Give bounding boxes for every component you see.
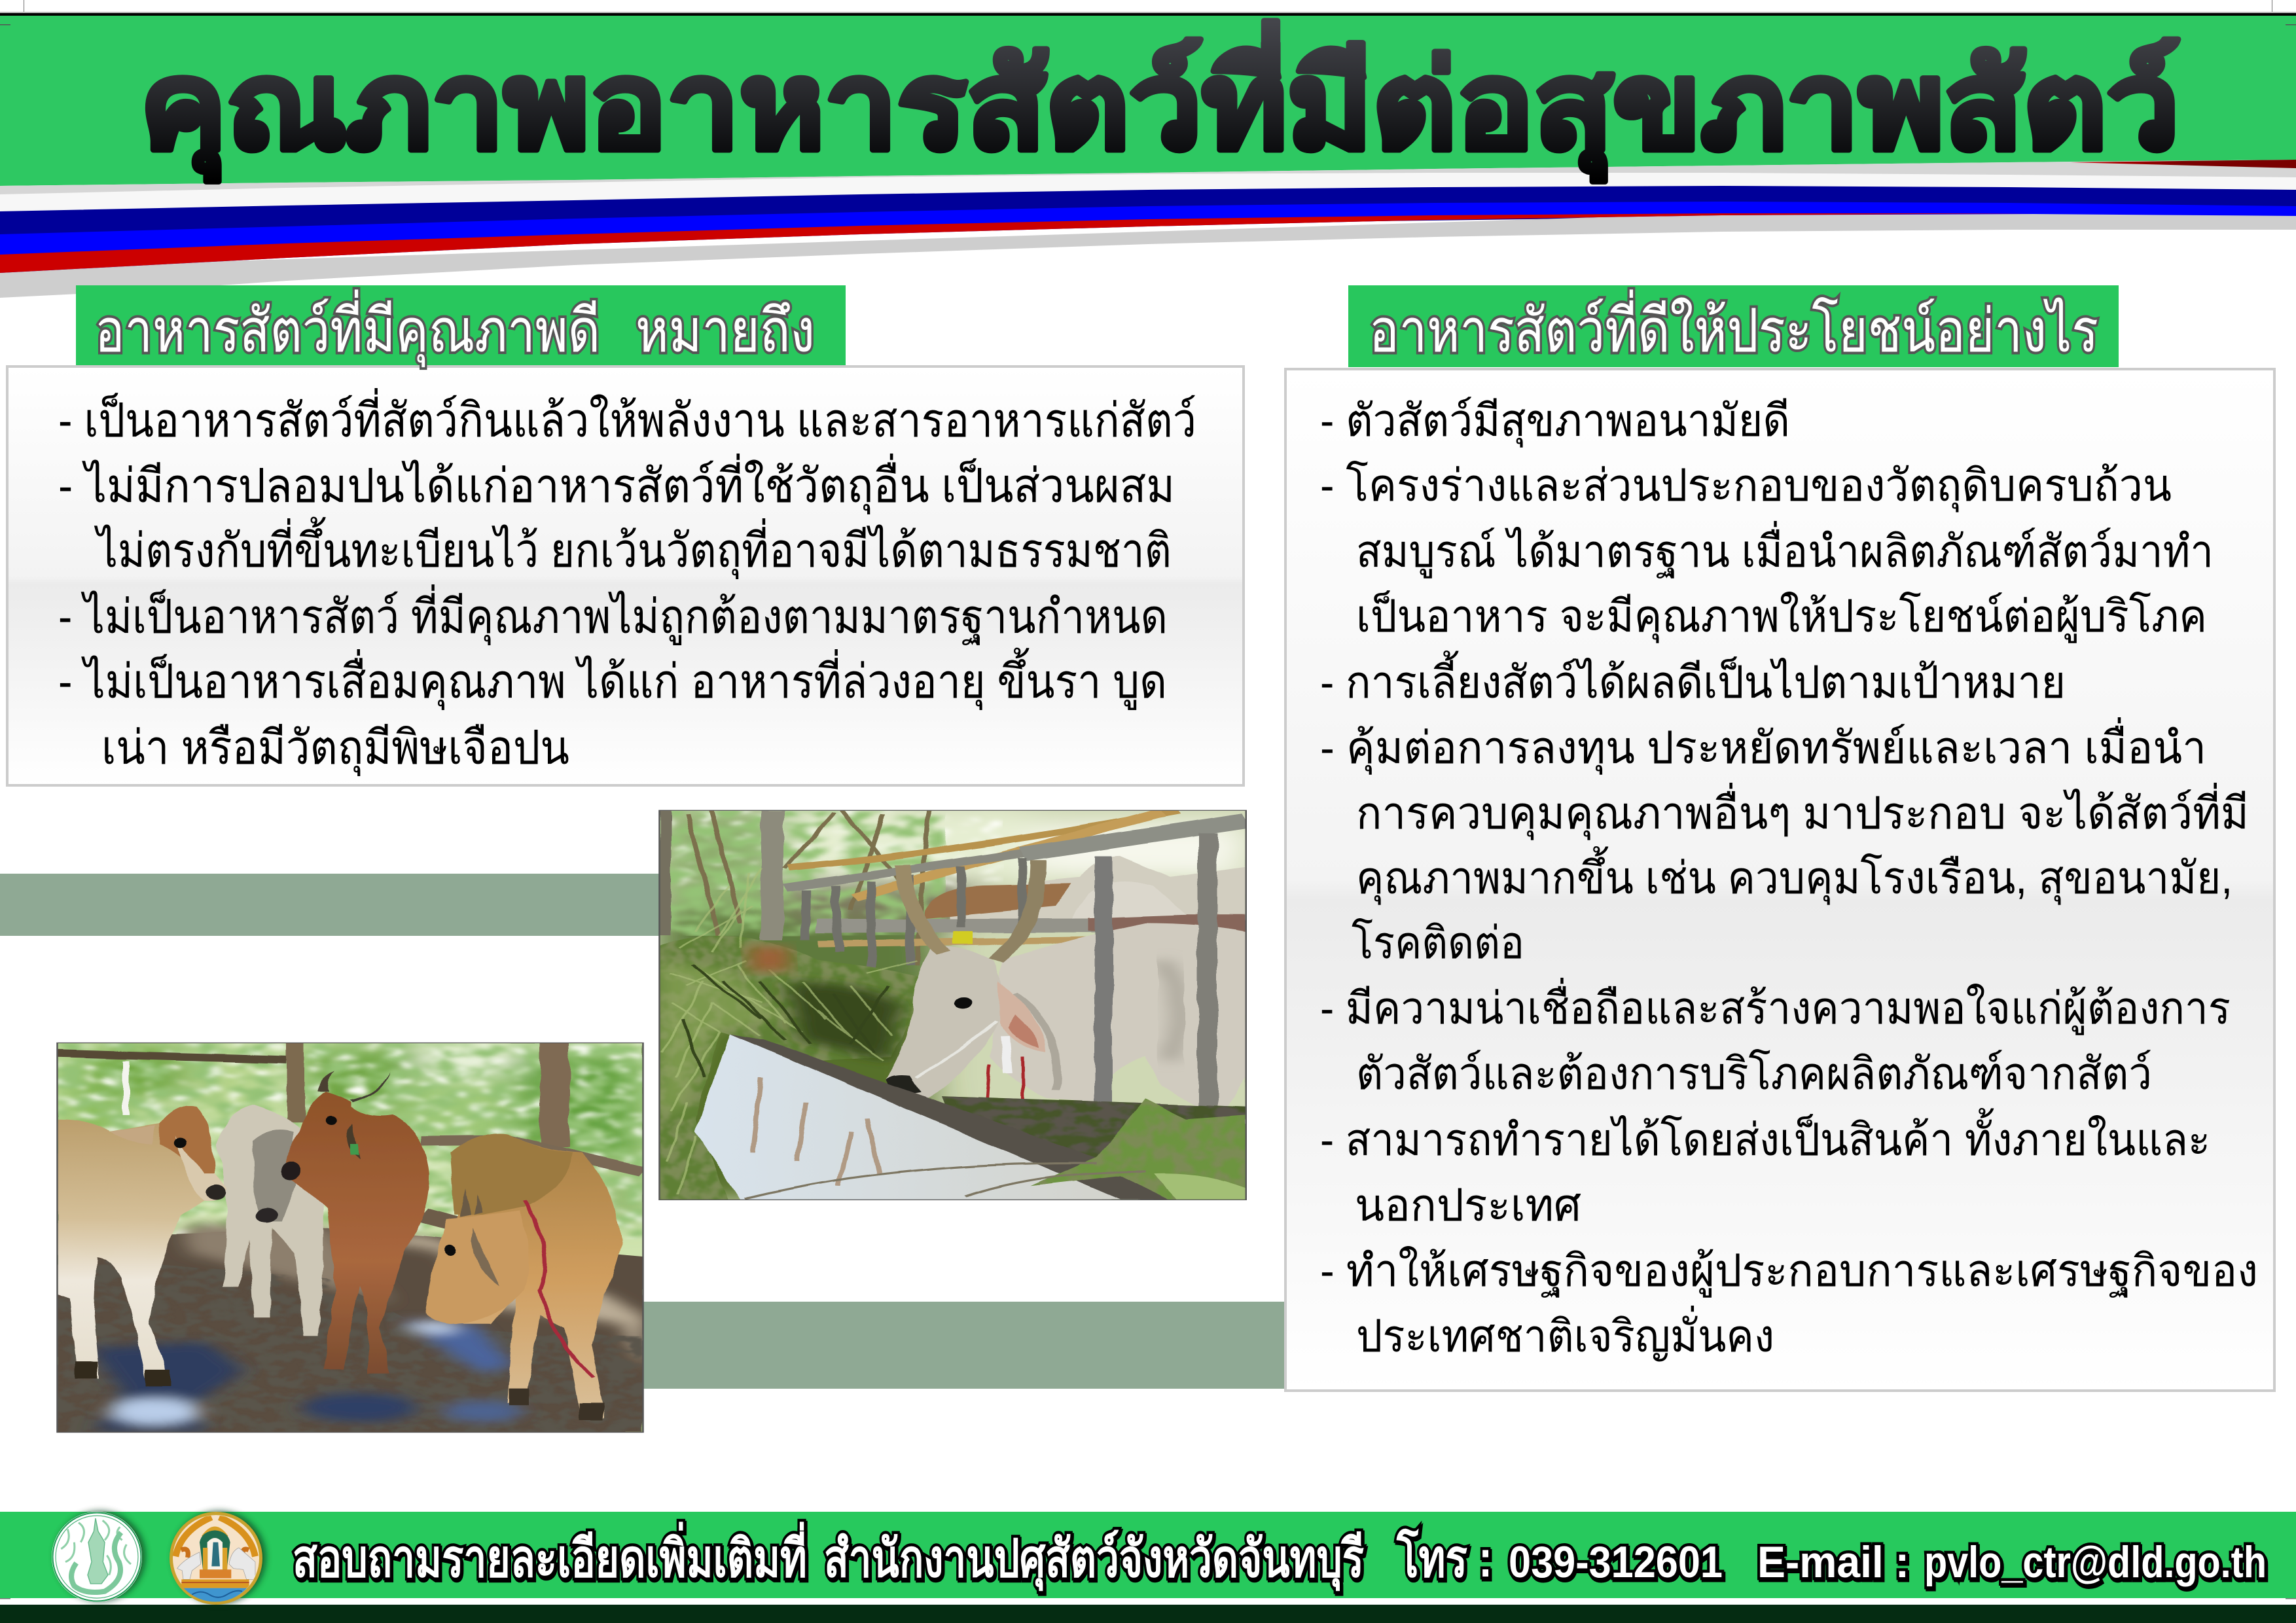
panel: what good feed means bbox=[7, 285, 1244, 785]
footer contact text: สำนักงานปศุสัตว์จังหวัดจันทบุรี bbox=[824, 1529, 1364, 1592]
panel: benefits of good feed bbox=[1285, 285, 2274, 1391]
left panel heading bbox=[76, 285, 846, 368]
left panel heading: หมายถึง bbox=[636, 298, 815, 365]
ground bbox=[58, 1228, 643, 1433]
seal ornament bbox=[61, 1520, 131, 1575]
right panel bullet text: ประเทศชาติเจริญมั่นคง bbox=[1356, 1306, 1774, 1361]
right panel bullet text: - โครงร่างและส่วนประกอบของวัตถุดิบครบถ้วน bbox=[1320, 460, 2172, 512]
near posts bbox=[1094, 856, 1113, 1107]
photo: four cows in muddy pen bbox=[58, 1043, 643, 1433]
grey-green bar left bbox=[0, 874, 661, 936]
right panel bullet text: - การเลี้ยงสัตว์ได้ผลดีเป็นไปตามเป้าหมาย bbox=[1320, 651, 2066, 707]
left panel bullet text: เน่า หรือมีวัตถุมีพิษเจือปน bbox=[101, 722, 569, 776]
cow: tan left bbox=[58, 1106, 228, 1386]
left panel bullet text: - เป็นอาหารสัตว์ที่สัตว์กินแล้วให้พลังงาน และสารอาหารแก่สัตว์ bbox=[58, 388, 1196, 447]
cow: grey bbox=[217, 1105, 323, 1336]
right panel bullet text: การควบคุมคุณภาพอื่นๆ มาประกอบ จะได้สัตว์ที่มี bbox=[1356, 783, 2249, 840]
right panel bullet text: - สามารถทำรายได้โดยส่งเป็นสินค้า ทั้งภายในและ bbox=[1320, 1108, 2210, 1165]
trough bbox=[941, 1096, 1246, 1200]
footer contact text: 039-312601 bbox=[1509, 1537, 1723, 1587]
foreground grass bbox=[1031, 1098, 1246, 1200]
left panel heading: อาหารสัตว์ที่มีคุณภาพดี bbox=[95, 289, 600, 368]
right panel heading bbox=[1348, 285, 2119, 367]
right panel bullet text: - คุ้มต่อการลงทุน ประหยัดทรัพย์และเวลา เมื่อนำ bbox=[1320, 717, 2206, 775]
title banner bbox=[0, 0, 2296, 186]
cow head bbox=[886, 946, 1003, 1101]
left panel bullet text: ไม่ตรงกับที่ขึ้นทะเบียนไว้ ยกเว้นวัตถุที่อาจมีได้ตามธรรมชาติ bbox=[94, 516, 1172, 579]
pen posts and rails bbox=[58, 1053, 287, 1060]
right panel bullet text: เป็นอาหาร จะมีคุณภาพให้ประโยชน์ต่อผู้บริโภค bbox=[1356, 590, 2207, 643]
right panel bullet text: - ตัวสัตว์มีสุขภาพอนามัยดี bbox=[1320, 396, 1790, 448]
ribbon stripes: grey white navy blue red grey bbox=[0, 160, 2296, 298]
cow body bbox=[990, 923, 1246, 1119]
right panel bullet text: สมบูรณ์ ได้มาตรฐาน เมื่อนำผลิตภัณฑ์สัตว์มาทำ bbox=[1356, 521, 2214, 579]
grey-green bar right bbox=[641, 1302, 1286, 1389]
left panel bullet text: - ไม่มีการปลอมปนได้แก่อาหารสัตว์ที่ใช้วัตถุอื่น เป็นส่วนผสม bbox=[58, 454, 1175, 514]
footer contact text: โทร : bbox=[1396, 1527, 1492, 1588]
cow: red-brown bbox=[280, 1071, 429, 1374]
logo: department of livestock seal bbox=[52, 1511, 145, 1602]
photo: white cow eating grass at trough bbox=[660, 810, 1246, 1200]
footer contact text: สอบถามรายละเอียดเพิ่มเติมที่ bbox=[293, 1522, 807, 1588]
right panel bullet text: ตัวสัตว์และต้องการบริโภคผลิตภัณฑ์จากสัตว์ bbox=[1356, 1048, 2152, 1099]
right panel bullet text: - ทำให้เศรษฐกิจของผู้ประกอบการและเศรษฐกิจของ bbox=[1320, 1245, 2258, 1298]
footer contact text: E-mail : bbox=[1757, 1537, 1909, 1587]
left panel bullet text bbox=[58, 388, 1196, 776]
right panel bullet text: โรคติดต่อ bbox=[1352, 918, 1524, 968]
grass pile bbox=[660, 935, 933, 1200]
right panel bullet text: นอกประเทศ bbox=[1355, 1181, 1581, 1230]
background fence and cows bbox=[950, 856, 1245, 919]
puddles bbox=[90, 1319, 524, 1433]
cow: golden head down bbox=[425, 1133, 622, 1419]
title text: คุณภาพอาหารสัตว์ที่มีต่อสุขภาพสัตว์ bbox=[140, 20, 2179, 182]
left panel bullet text: - ไม่เป็นอาหารสัตว์ ที่มีคุณภาพไม่ถูกต้องตามมาตรฐานกำหนด bbox=[58, 584, 1168, 645]
logo: chanthaburi provincial seal bbox=[170, 1511, 266, 1605]
seal flames bbox=[175, 1517, 211, 1556]
horns bbox=[903, 865, 942, 952]
right panel bullet text: - มีความน่าเชื่อถือและสร้างความพอใจแก่ผู้ต้องการ bbox=[1320, 978, 2231, 1035]
right panel heading: อาหารสัตว์ที่ดีให้ประโยชน์อย่างไร bbox=[1369, 289, 2098, 365]
footer contact bar bbox=[0, 1512, 2296, 1623]
right panel bullet text bbox=[1320, 396, 2258, 1361]
footer contact text bbox=[293, 1522, 2267, 1592]
left panel bullet text: - ไม่เป็นอาหารเสื่อมคุณภาพ ได้แก่ อาหารที่ล่วงอายุ ขึ้นรา บูด bbox=[58, 647, 1167, 710]
right panel bullet text: คุณภาพมากขึ้น เช่น ควบคุมโรงเรือน, สุขอนามัย, bbox=[1356, 846, 2233, 905]
